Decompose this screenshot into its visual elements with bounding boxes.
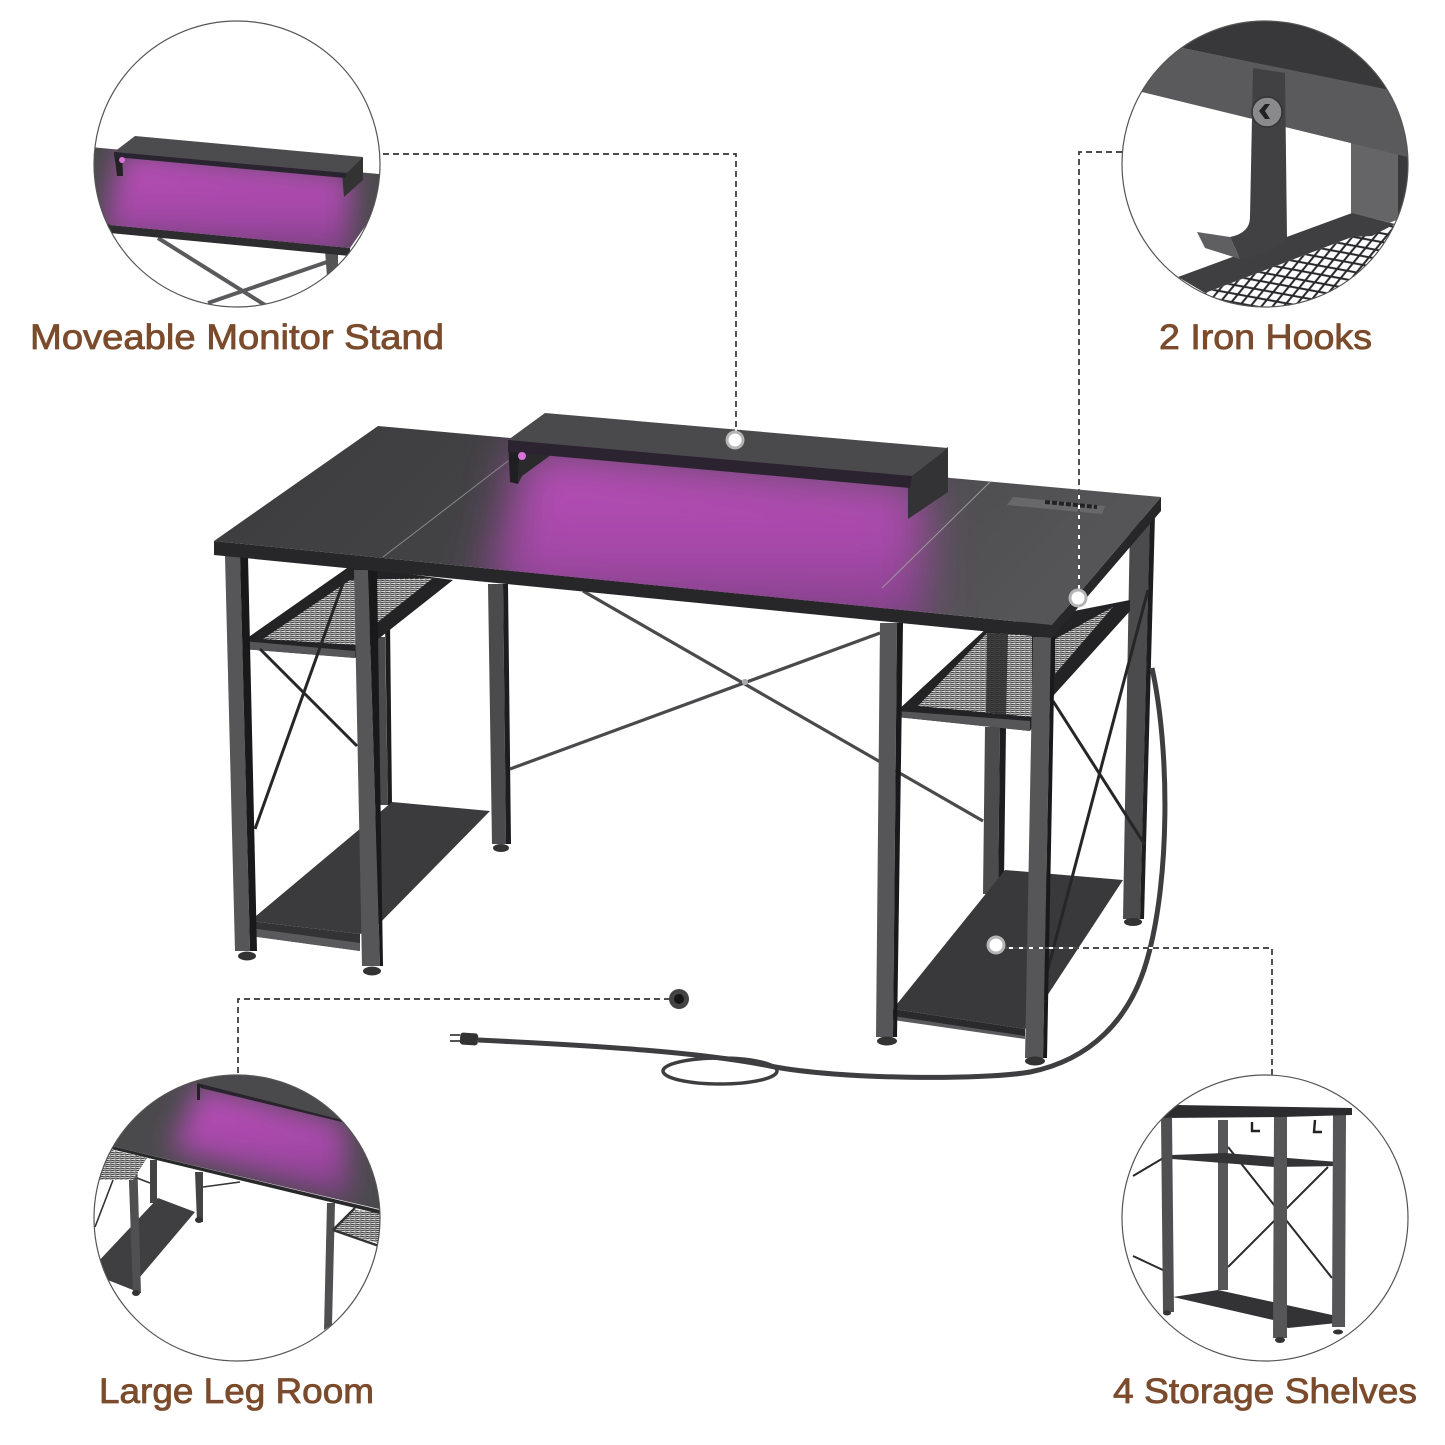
callout line: storage shelves [1003,948,1272,1075]
callout line: leg room [238,999,670,1075]
power plug [450,1032,478,1046]
heading: 4 storage shelves: 4 Storage Shelves [1113,1372,1417,1411]
marker: iron hooks [1068,588,1088,608]
callout line: iron hooks [1079,152,1122,590]
left side cross brace [255,572,357,829]
power cord [478,668,1165,1084]
panel: leg room detail [93,1074,381,1362]
heading: 2 iron hooks: 2 Iron Hooks [1159,318,1372,357]
panel: iron hook detail [1121,20,1409,308]
marker: monitor stand [726,430,744,450]
desk front legs [225,556,1055,1066]
upper mesh shelf right [897,600,1130,731]
marker: leg room [669,989,689,1009]
desk back legs [377,515,1155,926]
upper mesh shelf left [243,566,453,658]
lower shelf right [893,870,1123,1039]
monitor stand [508,413,948,519]
panel: monitor stand detail [93,20,381,308]
heading: moveable monitor stand: Moveable Monitor Stand [30,318,444,357]
heading: large leg room: Large Leg Room [99,1372,374,1411]
power strip [1007,497,1105,514]
panel: storage shelves detail [1122,1075,1408,1361]
desktop [214,426,1161,640]
callout line: monitor stand [383,154,736,435]
right side cross brace [1045,590,1148,980]
marker: storage shelves [986,936,1006,954]
main desk illustration [214,413,1165,1084]
center cross brace [510,591,983,821]
lower shelf left [250,802,490,951]
